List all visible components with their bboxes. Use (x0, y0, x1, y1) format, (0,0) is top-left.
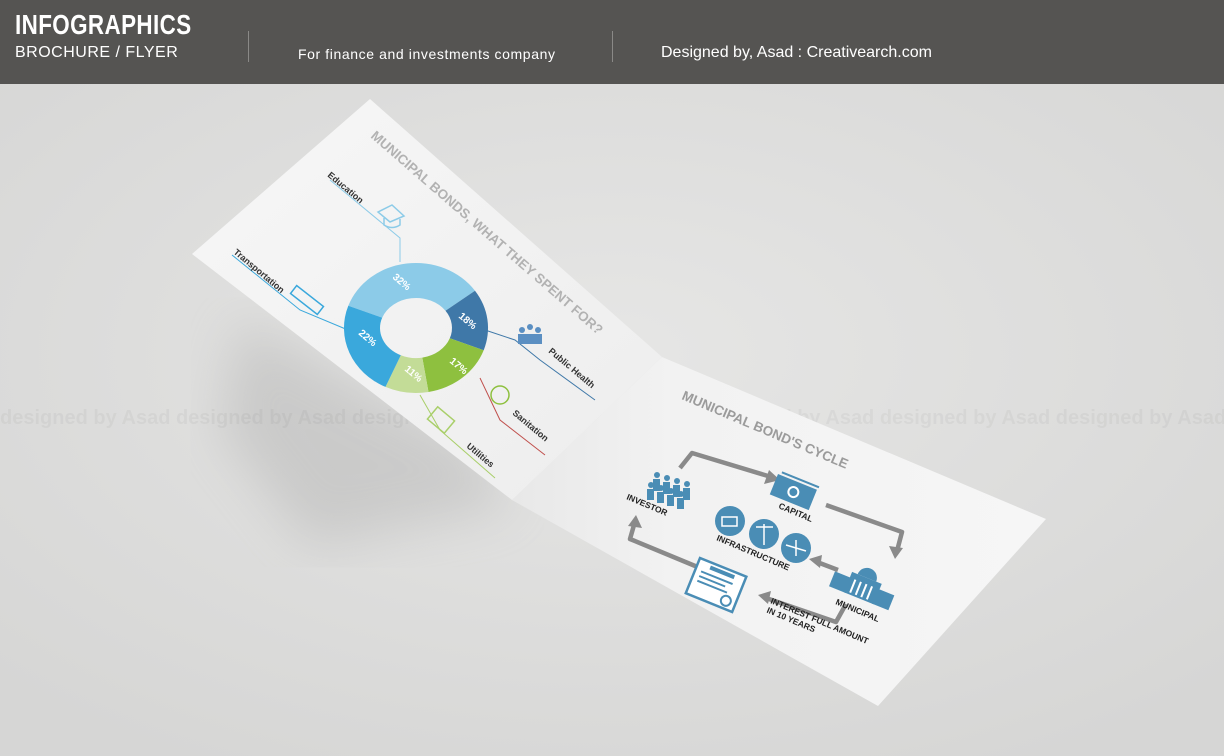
icon: municipal (829, 557, 900, 610)
icon: promissory note (686, 558, 746, 612)
category labels: Transportation (232, 247, 286, 295)
title: INFOGRAPHICS (15, 9, 192, 40)
description: For finance and investments company (298, 46, 556, 62)
left page (192, 99, 662, 500)
arrows (630, 453, 902, 622)
icons: infrastructure (715, 506, 811, 563)
municipal label: MUNICIPAL (834, 597, 881, 624)
header bar (0, 0, 1224, 84)
category labels: Sanitation (511, 408, 550, 444)
donut chart: 18% (456, 311, 479, 332)
icons small (291, 205, 509, 433)
interest label: INTEREST FULL AMOUNT (769, 596, 871, 646)
infrastructure label: INFRASTRUCTURE (715, 533, 792, 573)
category labels: Education (326, 170, 365, 206)
right page (512, 357, 1046, 706)
donut chart: 32% (390, 272, 413, 293)
interest label: IN 10 YEARS (765, 605, 817, 634)
icon: capital (770, 470, 819, 511)
subtitle: BROCHURE / FLYER (15, 44, 178, 61)
category labels (232, 170, 597, 469)
cycle title: MUNICIPAL BOND'S CYCLE (680, 388, 850, 472)
credit: Designed by, Asad : Creativearch.com (661, 44, 932, 61)
shadow (220, 320, 515, 545)
category labels: Utilities (465, 441, 496, 469)
donut chart (344, 263, 488, 393)
donut chart: 22% (356, 328, 379, 349)
capital label: CAPITAL (777, 501, 814, 524)
donut chart: 17% (447, 356, 470, 377)
leader lines (232, 180, 595, 478)
category labels: Public Health (547, 346, 597, 390)
investor label: INVESTOR (625, 492, 669, 518)
donut title: MUNICIPAL BONDS, WHAT THEY SPENT FOR? (368, 128, 606, 337)
donut chart: 11% (402, 364, 424, 385)
icon: investor (647, 472, 690, 509)
